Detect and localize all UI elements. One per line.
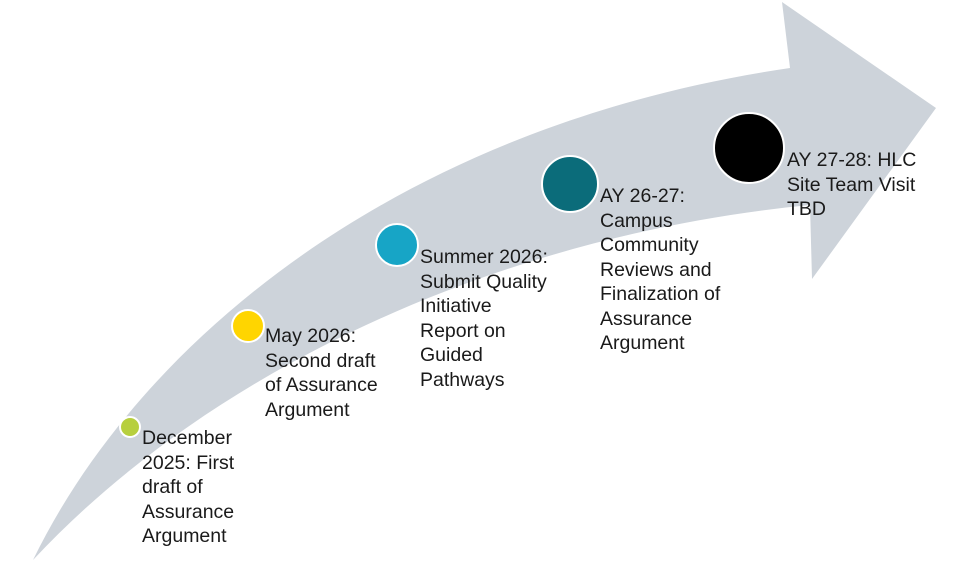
text: milestone 3: Guided <box>420 344 483 366</box>
text: milestone 2 <box>265 325 378 420</box>
milestone 3 circle <box>376 224 418 266</box>
text: milestone 4: Finalization of <box>600 283 720 305</box>
text: milestone 1: Argument <box>142 525 227 547</box>
text: milestone 1: Assurance <box>142 500 234 522</box>
text: milestone 3: Pathways <box>420 368 505 390</box>
text: milestone 5: Site Team Visit <box>787 174 915 196</box>
text: milestone 2: Second draft <box>265 350 376 372</box>
text: milestone 5 <box>787 149 916 220</box>
text: milestone 3: Initiative <box>420 295 492 317</box>
milestone 5 circle <box>714 113 784 183</box>
text: milestone 1 <box>142 427 234 547</box>
text: milestone 3: Report on <box>420 320 506 342</box>
text: milestone 4: Argument <box>600 332 685 354</box>
text: milestone 4: AY 26-27: <box>600 185 685 207</box>
text: milestone 2: of Assurance <box>265 374 378 396</box>
text: milestone 4: Assurance <box>600 308 692 330</box>
text: milestone 2: May 2026: <box>265 325 356 347</box>
text: milestone 5: AY 27-28: HLC <box>787 149 916 171</box>
text: milestone 3 <box>420 246 548 390</box>
text: milestone 4 <box>600 185 720 354</box>
text: milestone 4: Reviews and <box>600 258 712 280</box>
milestone 4 circle <box>542 156 598 212</box>
text: milestone 4: Community <box>600 234 699 256</box>
text: milestone 4: Campus <box>600 210 673 232</box>
milestone 2 circle <box>232 310 264 342</box>
text: milestone 1: 2025: First <box>142 452 234 474</box>
text: milestone 2: Argument <box>265 398 350 420</box>
text: milestone 1: draft of <box>142 476 203 498</box>
text: milestone 1: December <box>142 427 232 449</box>
text: milestone 3: Submit Quality <box>420 270 547 292</box>
milestone 1 circle <box>120 417 140 437</box>
text: milestone 5: TBD <box>787 198 826 220</box>
text: milestone 3: Summer 2026: <box>420 246 548 268</box>
